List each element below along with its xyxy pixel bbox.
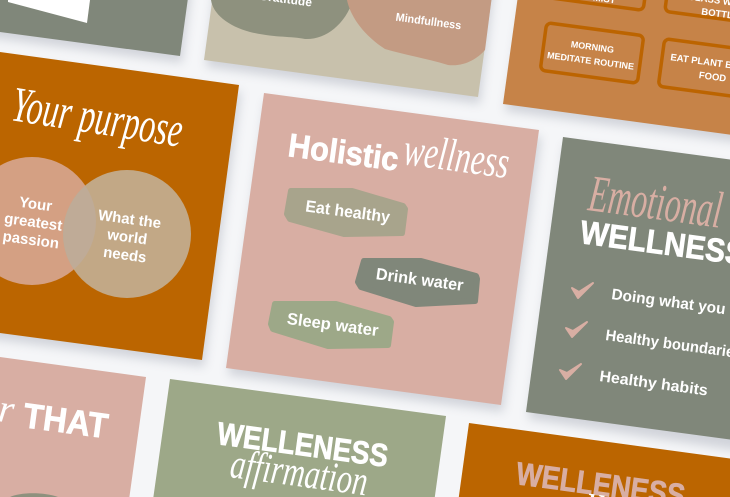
panel: bottom-left pink card [0, 357, 146, 497]
heading: your purpose: Your purpose [8, 76, 187, 158]
text: morning meditate routine: MORNING [570, 39, 615, 55]
blob: mindfulness [347, 0, 491, 65]
text: your greatest passion: passion [2, 228, 60, 252]
heading script: wellness: wellness [401, 123, 513, 188]
icon: check one [572, 283, 593, 298]
pill: sleep water: Sleep water [286, 310, 380, 340]
panel: wellness affirmation card [153, 379, 446, 497]
pill: drink water [358, 261, 477, 304]
pill: eat healthy: Eat healthy [304, 197, 392, 227]
text: morning meditate routine: MEDITATE ROUTINE [546, 50, 635, 72]
text: your greatest passion: Your [18, 194, 53, 215]
pill: eat healthy [287, 191, 405, 234]
panel: holistic wellness card [226, 93, 539, 405]
text: your greatest passion: greatest [3, 210, 63, 235]
icon: check two [566, 322, 587, 337]
panel: top-left sage card [0, 0, 188, 56]
venn: your greatest passion [0, 157, 96, 285]
box: plant based food [658, 39, 730, 99]
panel: emotional wellness card [526, 137, 730, 440]
venn: what the world needs [63, 170, 191, 298]
text: what the world needs: needs [102, 244, 147, 267]
text: eat plant based food: FOOD [698, 70, 727, 85]
box: mist [546, 0, 647, 10]
text: what the world needs: world [105, 226, 148, 248]
blob: bottom sage [10, 493, 58, 497]
icon: check three [560, 364, 581, 379]
panel: routine checklist card [503, 0, 730, 135]
white photo block [8, 0, 90, 23]
pill: sleep water [271, 304, 391, 346]
heading: welleness: WELLENESS [215, 415, 390, 474]
pill: drink water: Drink water [375, 265, 465, 295]
text: what the world needs: What the [97, 207, 162, 232]
heading: holistic: Holistic [286, 126, 401, 178]
item: healthy habits: Healthy habits [598, 368, 709, 399]
blob: gratitude [211, 0, 353, 39]
panel: gratitude and mindfulness blobs [204, 0, 491, 97]
panel: your purpose venn card [0, 52, 239, 360]
venn: overlap [63, 186, 96, 270]
label: mindfulness: Mindfullness [395, 12, 462, 32]
box: morning routine [540, 23, 644, 83]
panel: bottom-right orange card [459, 423, 730, 497]
box: bottle [665, 0, 730, 24]
heading: that: THAT [21, 396, 110, 446]
